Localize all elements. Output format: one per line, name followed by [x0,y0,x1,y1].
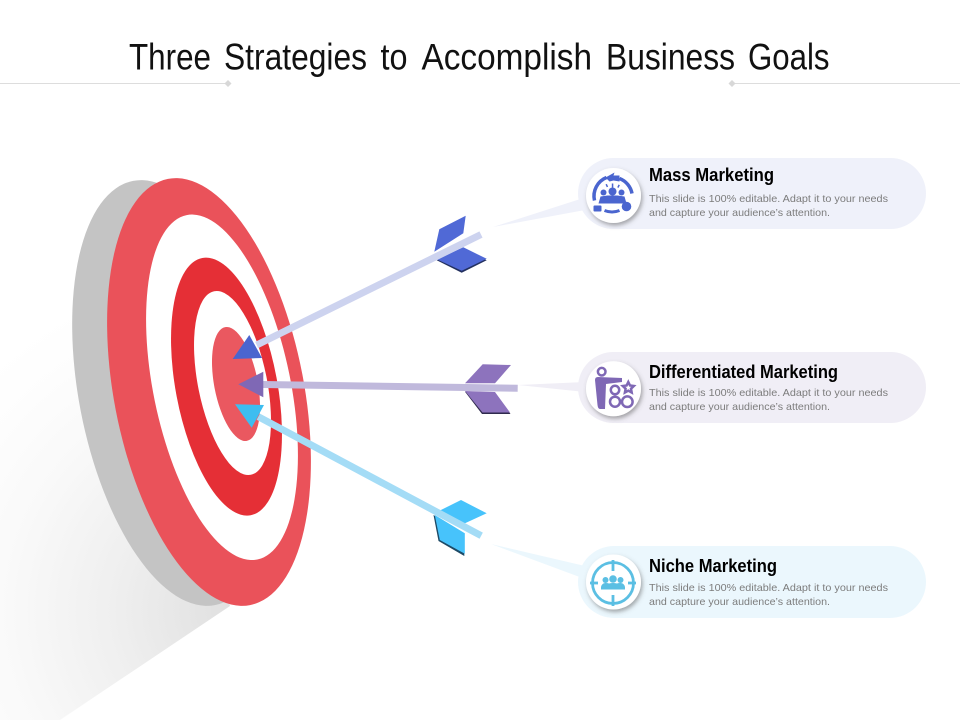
target shadow [0,220,230,720]
text: mass marketing description: and capture your audience’s attention. [649,207,830,219]
panel: differentiated marketing [578,352,926,423]
arrow: purple [238,364,518,414]
text: differentiated marketing description [649,387,888,413]
connector: niche marketing [491,544,585,579]
panel: niche marketing [578,546,926,618]
title: Accomplish [422,36,592,78]
title: Goals [748,36,830,78]
title rule [0,80,960,87]
icon: differentiated marketing [586,361,641,416]
text: differentiated marketing description: This slide is 100% editable. Adapt it to your needs [649,387,888,399]
icon: niche marketing [586,554,641,610]
panel: mass marketing [578,158,926,229]
title: Business [606,36,735,78]
title: Strategies [224,36,367,78]
text: differentiated marketing description: and capture your audience’s attention. [649,401,830,413]
text: mass marketing description: This slide is 100% editable. Adapt it to your needs [649,193,888,205]
text: niche marketing description: and capture your audience’s attention. [649,596,830,608]
bullseye [204,323,268,445]
icon: mass marketing [586,168,641,223]
heading: niche marketing: Niche Marketing [649,556,777,576]
white ring [119,201,325,573]
heading: mass marketing: Mass Marketing [649,165,774,185]
connector: mass marketing [493,198,585,227]
inner white ring [180,284,285,482]
title: to [380,36,408,78]
outer ring [75,161,343,623]
target side [40,163,308,623]
text: mass marketing description [649,193,888,219]
text: niche marketing description: This slide is 100% editable. Adapt it to your needs [649,582,888,594]
arrow: blue [233,216,487,359]
red ring [152,249,301,525]
text: niche marketing description [649,582,888,608]
connector: differentiated marketing [518,382,585,392]
target board [40,161,343,623]
title: Three [129,36,211,78]
heading: differentiated marketing: Differentiated Marketing [649,362,838,382]
arrow: cyan [235,404,487,556]
title [129,36,830,78]
